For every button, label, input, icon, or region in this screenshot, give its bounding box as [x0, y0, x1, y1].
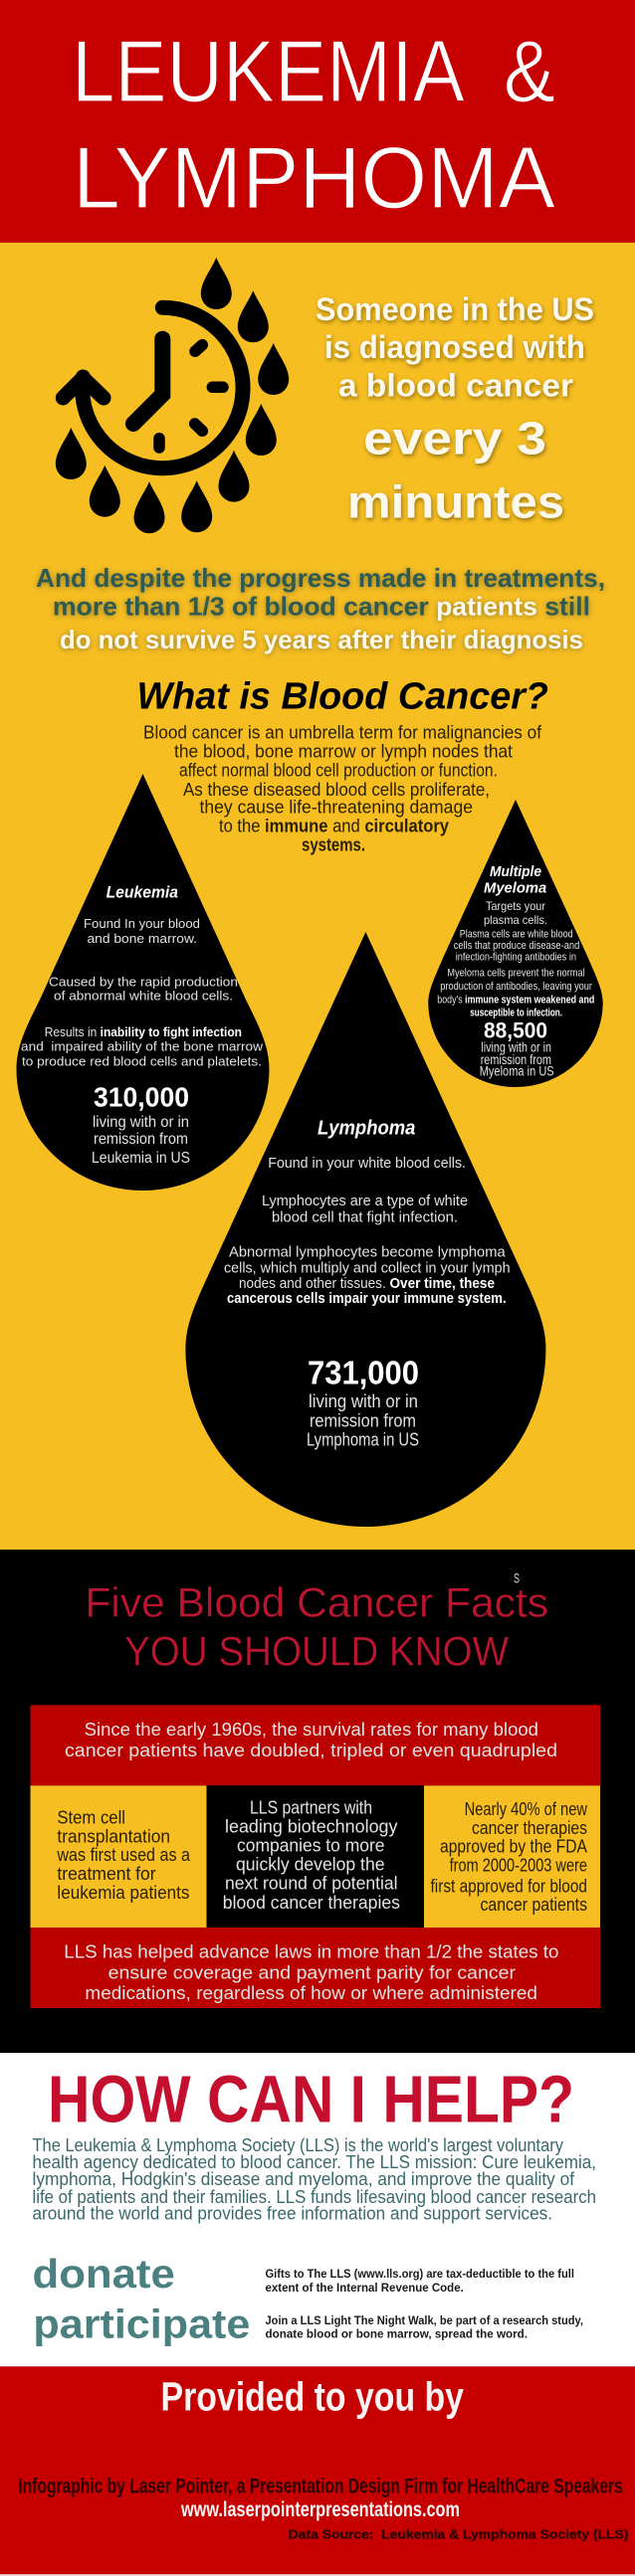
myeloma description: infection-fighting antibodies in [456, 952, 576, 964]
header panel [0, 0, 635, 243]
fact: advancing laws: LLS has helped advance laws in more than 1/2 the states to [64, 1941, 558, 1961]
intro text: they cause life-threatening damage [199, 798, 473, 818]
myeloma description: production of antibodies, leaving your [440, 981, 592, 993]
drop: lymphoma [185, 932, 545, 1527]
myeloma statistic [480, 1017, 554, 1079]
lymphoma statistic: 731,000 [308, 1355, 419, 1391]
lymphoma statistic: remission from [310, 1410, 416, 1430]
lymphoma description: Abnormal lymphocytes become lymphoma [229, 1244, 507, 1260]
lymphoma statistic: living with or in [309, 1391, 418, 1411]
facts heading: Five Blood Cancer Facts [85, 1579, 548, 1626]
LLS description: around the world and provides free information and support services. [32, 2204, 552, 2224]
title: LYMPHOMA [73, 128, 555, 227]
leukemia description: Results in inability to fight infection [45, 1024, 242, 1039]
website: www.laserpointerpresentations.com [180, 2498, 460, 2521]
fact: stem cell transplantation: Stem cell [57, 1807, 125, 1827]
myeloma description: plasma cells. [484, 913, 547, 927]
myeloma statistic: Myeloma in US [480, 1064, 554, 1079]
intro text: the blood, bone marrow or lymph nodes that [174, 742, 513, 762]
lymphoma heading: Lymphoma [318, 1118, 415, 1140]
survival statement: do not survive 5 years after their diagnosis [60, 625, 583, 654]
facts heading: YOU SHOULD KNOW [124, 1627, 509, 1674]
survival statement [36, 563, 605, 654]
hero statistic text: Someone in the US [316, 291, 594, 327]
fact: stem cell transplantation: treatment for [57, 1864, 156, 1884]
intro text [143, 723, 542, 855]
LLS description [32, 2135, 596, 2224]
panel: how can I help (white) [0, 2053, 635, 2367]
icon: clock with blood drops [56, 258, 289, 533]
fact: biotechnology partners: blood cancer therapies [223, 1893, 400, 1913]
lymphoma description: nodes and other tissues. Over time, these [239, 1276, 495, 1292]
lymphoma description [224, 1156, 511, 1307]
fact: FDA approved therapies: approved by the FDA [440, 1837, 587, 1857]
action: donate: donate [32, 2251, 175, 2297]
myeloma description: body's immune system weakened and [437, 994, 594, 1006]
leukemia description [21, 916, 264, 1069]
lymphoma description: blood cell that fight infection. [272, 1209, 458, 1225]
myeloma heading: Multiple [490, 863, 541, 880]
hero statistic text: every 3 [363, 413, 546, 464]
panel: five blood cancer facts (black) [0, 1550, 635, 2053]
leukemia description: and impaired ability of the bone marrow [21, 1039, 264, 1054]
fact: stem cell transplantation: leukemia patients [57, 1883, 189, 1903]
fact: FDA approved therapies: Nearly 40% of new [465, 1799, 588, 1819]
intro text: As these diseased blood cells proliferate, [183, 780, 490, 800]
fact: survival rates [30, 1705, 600, 1785]
LLS description: health agency dedicated to blood cancer. The LLS mission: Cure leukemia, [32, 2152, 596, 2172]
lymphoma statistic: Lymphoma in US [307, 1429, 419, 1449]
panel: footer credits [0, 2366, 635, 2576]
hero statistic text [316, 291, 594, 528]
fact: biotechnology partners: companies to more [237, 1836, 384, 1856]
intro text: affect normal blood cell production or function. [179, 761, 498, 781]
facts heading [85, 1579, 548, 1674]
fact: biotechnology partners: LLS partners with [250, 1797, 372, 1817]
myeloma statistic: 88,500 [484, 1017, 547, 1042]
lymphoma description: cells, which multiply and collect in your lymph [224, 1260, 511, 1276]
title: LEUKEMIA & [72, 22, 555, 120]
leukemia heading: Leukemia [106, 883, 178, 902]
myeloma statistic: living with or in [481, 1040, 551, 1055]
participate details: donate blood or bone marrow, spread the word. [265, 2329, 528, 2341]
lymphoma description: Lymphocytes are a type of white [262, 1194, 468, 1209]
myeloma description: cells that produce disease-and [454, 940, 579, 952]
provided to you by: Provided to you by [161, 2373, 464, 2419]
myeloma description: Targets your [486, 899, 545, 913]
fact: biotechnology partners: leading biotechnology [225, 1817, 398, 1837]
donate details: extent of the Internal Revenue Code. [265, 2283, 464, 2295]
data source: Data Source: Leukemia & Lymphoma Society (LLS) [289, 2527, 628, 2542]
participate details [265, 2315, 583, 2341]
fact: FDA approved therapies: from 2000-2003 were [450, 1856, 587, 1876]
fact: biotechnology partners [207, 1785, 424, 1928]
intro text: to the immune and circulatory [219, 817, 449, 836]
leukemia description: Caused by the rapid production [49, 975, 238, 990]
leukemia statistic: living with or in [93, 1114, 189, 1131]
survival statement: And despite the progress made in treatments, [36, 563, 605, 593]
lymphoma description: cancerous cells impair your immune system. [227, 1291, 507, 1307]
donate details: Gifts to The LLS (www.lls.org) are tax-deductible to the full [265, 2269, 574, 2281]
drop: leukemia [16, 774, 269, 1191]
fact: advancing laws [30, 1928, 600, 2008]
fact: survival rates: cancer patients have doubled, tripled or even quadrupled [65, 1741, 557, 1760]
fact: stem cell transplantation: was first used as a [57, 1845, 191, 1865]
fact: advancing laws: medications, regardless of how or where administered [85, 1983, 537, 2003]
leukemia statistic [92, 1082, 190, 1167]
leukemia description: of abnormal white blood cells. [54, 989, 233, 1004]
fact: FDA approved therapies: cancer patients [480, 1895, 587, 1915]
fact: survival rates: Since the early 1960s, the survival rates for many blood [85, 1720, 538, 1740]
myeloma heading [484, 863, 546, 897]
fact: FDA approved therapies [424, 1785, 600, 1928]
leukemia statistic: remission from [94, 1131, 188, 1148]
survival statement: more than 1/3 of blood cancer patients still [53, 592, 590, 622]
fact: biotechnology partners: next round of potential [225, 1873, 398, 1893]
LLS description: The Leukemia & Lymphoma Society (LLS) is the world's largest voluntary [32, 2135, 563, 2155]
myeloma heading: Myeloma [484, 880, 546, 897]
myeloma statistic: remission from [481, 1052, 551, 1067]
heading: what is blood cancer: What is Blood Cancer? [137, 676, 548, 718]
myeloma description: susceptible to infection. [470, 1008, 562, 1019]
leukemia description: Found In your blood [84, 916, 200, 931]
leukemia statistic: Leukemia in US [92, 1150, 190, 1167]
fact: biotechnology partners: quickly develop the [236, 1855, 384, 1875]
myeloma description [437, 899, 594, 1019]
action: participate: participate [33, 2301, 250, 2347]
heading: how can I help: HOW CAN I HELP? [48, 2062, 574, 2136]
fact: stem cell transplantation: transplantation [57, 1826, 170, 1846]
participate details: Join a LLS Light The Night Walk, be part of a research study, [265, 2315, 583, 2327]
myeloma description: Plasma cells are white blood [460, 929, 573, 941]
fact: FDA approved therapies: first approved for blood [430, 1876, 587, 1896]
leukemia description: and bone marrow. [88, 931, 197, 946]
hero statistic text: a blood cancer [338, 368, 573, 404]
leukemia description: to produce red blood cells and platelets. [22, 1054, 262, 1069]
LLS description: life of patients and their families. LLS funds lifesaving blood cancer research [32, 2187, 596, 2207]
fact: FDA approved therapies: cancer therapies [472, 1818, 587, 1838]
title [72, 22, 555, 227]
fact: stem cell transplantation [30, 1785, 207, 1928]
lymphoma description: Found in your white blood cells. [268, 1156, 466, 1172]
lymphoma statistic [307, 1355, 419, 1449]
panel: what is blood cancer (yellow) [0, 243, 635, 1551]
donate details [265, 2269, 574, 2295]
leukemia statistic: 310,000 [94, 1082, 189, 1113]
drop: multiple myeloma [428, 800, 603, 1087]
intro text: Blood cancer is an umbrella term for malignancies of [143, 723, 542, 743]
hero statistic text: minuntes [347, 476, 564, 528]
intro text: systems. [302, 835, 365, 855]
myeloma description: Myeloma cells prevent the normal [447, 968, 585, 980]
LLS description: lymphoma, Hodgkin's disease and myeloma, and improve the quality of [32, 2169, 575, 2189]
hero statistic text: is diagnosed with [324, 329, 585, 365]
stray letter s: S [514, 1570, 520, 1586]
fact: advancing laws: ensure coverage and payment parity for cancer [108, 1962, 516, 1982]
